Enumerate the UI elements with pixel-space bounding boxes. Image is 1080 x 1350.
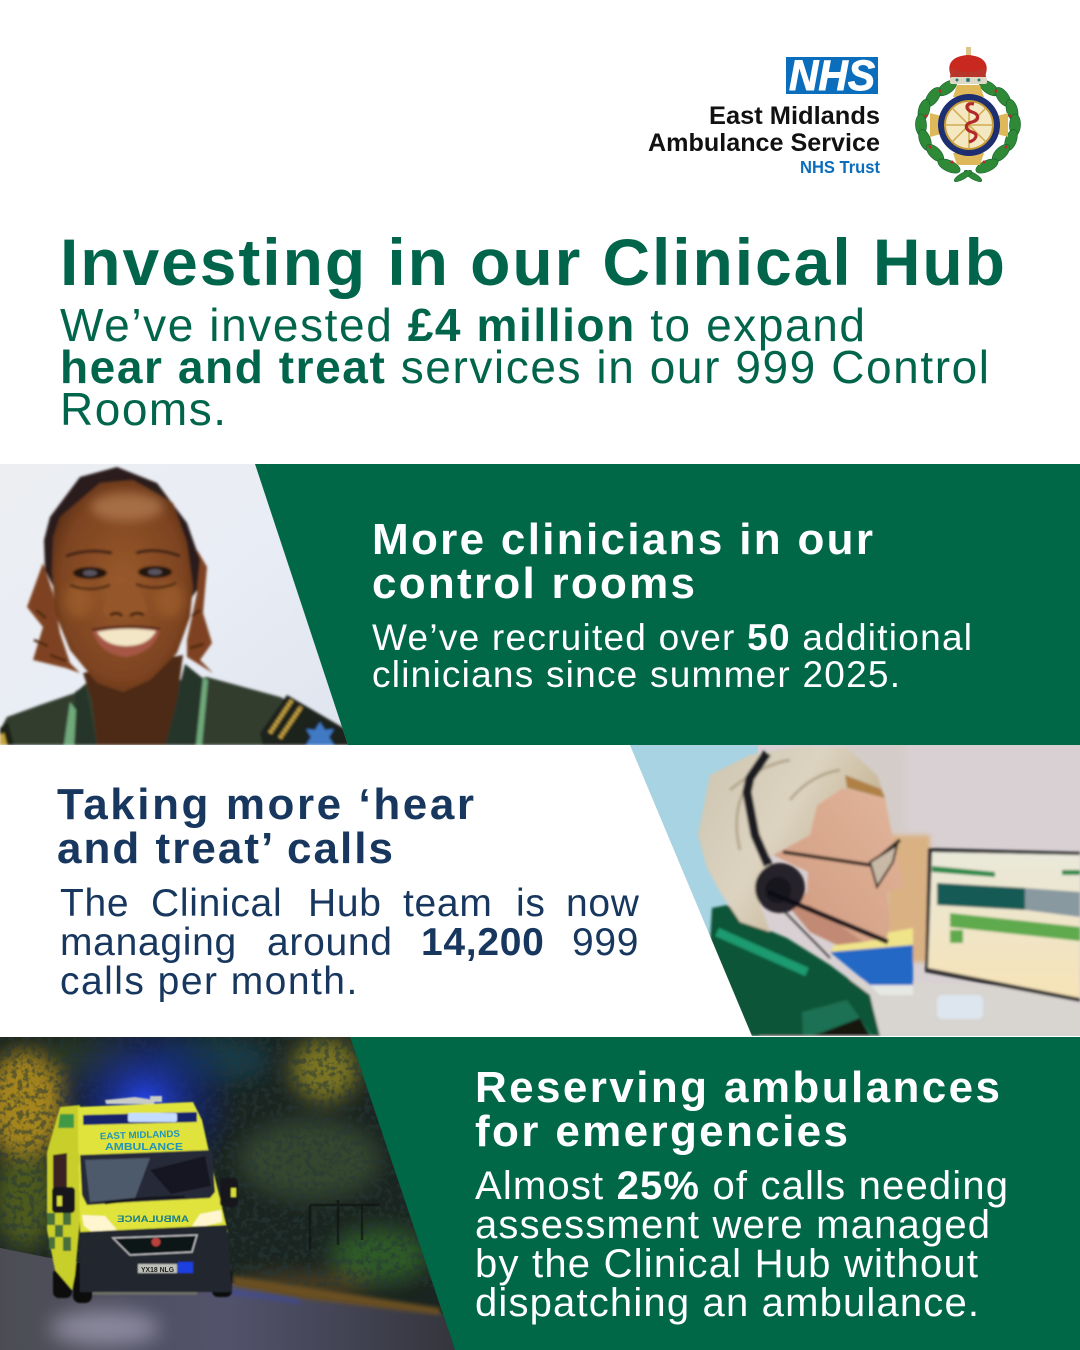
heading: Reserving ambulances: [475, 1063, 1000, 1112]
body text: Clinical: [151, 882, 282, 925]
bumper: [80, 1225, 232, 1292]
panel: more clinicians: [0, 464, 1080, 745]
body text: assessment were managed: [475, 1203, 990, 1247]
epaulette: [260, 695, 352, 745]
body text: is: [516, 882, 546, 925]
heading: [475, 1063, 1000, 1156]
heading: control rooms: [372, 559, 695, 608]
heading: Taking more ‘hear: [57, 780, 474, 829]
glasses: [783, 840, 900, 865]
body text: [372, 617, 972, 695]
body text: 14,200: [421, 921, 544, 964]
ambulance markings: AMBULANCE: [117, 1214, 189, 1225]
panel: reserving ambulances: [0, 1010, 1080, 1350]
body text: managing: [60, 921, 237, 964]
windscreen: [80, 1150, 215, 1205]
body text: now: [566, 882, 640, 925]
intro text: hear and treat services in our 999 Control: [60, 341, 989, 393]
heading: and treat’ calls: [57, 824, 393, 873]
intro text: We’ve invested £4 million to expand: [60, 299, 865, 351]
organisation name: NHS Trust: [800, 157, 880, 177]
road: [0, 1248, 456, 1350]
hair locks: [27, 563, 80, 673]
berries: [924, 90, 1012, 164]
mirrors: [52, 1187, 75, 1213]
headset: [747, 753, 768, 865]
shirt: [0, 675, 286, 745]
laptop: [830, 928, 913, 952]
body text: 999: [572, 921, 639, 964]
neck: [83, 655, 183, 745]
mouth: [92, 626, 160, 657]
title: Investing in our Clinical Hub: [60, 225, 1005, 299]
lanyard: [64, 678, 208, 745]
body text: around: [267, 921, 393, 964]
heading: More clinicians in our: [372, 515, 873, 564]
heading: [57, 780, 474, 873]
monitor: [925, 848, 1080, 1002]
headlights: [82, 1215, 117, 1232]
crown: [949, 47, 987, 84]
body text: Almost 25% of calls needing: [475, 1164, 1008, 1208]
body text: [60, 882, 640, 1003]
body text: Hub: [308, 882, 382, 925]
body text: by the Clinical Hub without: [475, 1242, 978, 1286]
hair: [698, 747, 885, 932]
body text: We’ve recruited over 50 additional: [372, 617, 972, 658]
hair top: [44, 467, 200, 600]
fence: [310, 1200, 380, 1250]
face: [52, 480, 193, 692]
wreath: [915, 77, 1021, 184]
organisation name: Ambulance Service: [648, 129, 880, 157]
photo: call handler with headset: [630, 745, 1080, 1037]
nose: [144, 611, 145, 612]
fleece: [710, 905, 880, 1036]
body text: [475, 1164, 1008, 1325]
face: [773, 788, 903, 945]
heading: [372, 515, 873, 608]
logo: NHS East Midlands Ambulance Service: [648, 52, 880, 177]
body text: dispatching an ambulance.: [475, 1281, 979, 1325]
organisation name: [648, 102, 880, 177]
NHS lozenge: NHS: [789, 52, 875, 100]
intro text: [60, 299, 989, 435]
ambulance markings: EAST MIDLANDS: [100, 1129, 180, 1142]
van side: [47, 1105, 80, 1290]
body text: The: [60, 882, 129, 925]
body text: team: [403, 882, 493, 925]
crest: ambulance service badge: [915, 47, 1021, 184]
brows and eyes: [66, 551, 180, 556]
photo: smiling clinician: [0, 464, 352, 745]
ambulance markings: [100, 1129, 189, 1274]
organisation name: East Midlands: [709, 102, 880, 130]
panel: hear and treat: [57, 745, 1080, 1037]
cross: [930, 85, 1008, 165]
van front: [78, 1102, 228, 1232]
ambulance markings: AMBULANCE: [105, 1141, 183, 1153]
blue ring: [938, 94, 1000, 156]
heading: for emergencies: [475, 1107, 848, 1156]
centre wheel: [945, 101, 993, 149]
body text: calls per month.: [60, 960, 358, 1003]
wheels: [53, 1268, 72, 1298]
body text: clinicians since summer 2025.: [372, 654, 900, 695]
intro text: Rooms.: [60, 383, 226, 435]
ambulance markings: YX18 NLG: [141, 1265, 174, 1274]
photo: ambulance at night: [0, 1010, 456, 1350]
